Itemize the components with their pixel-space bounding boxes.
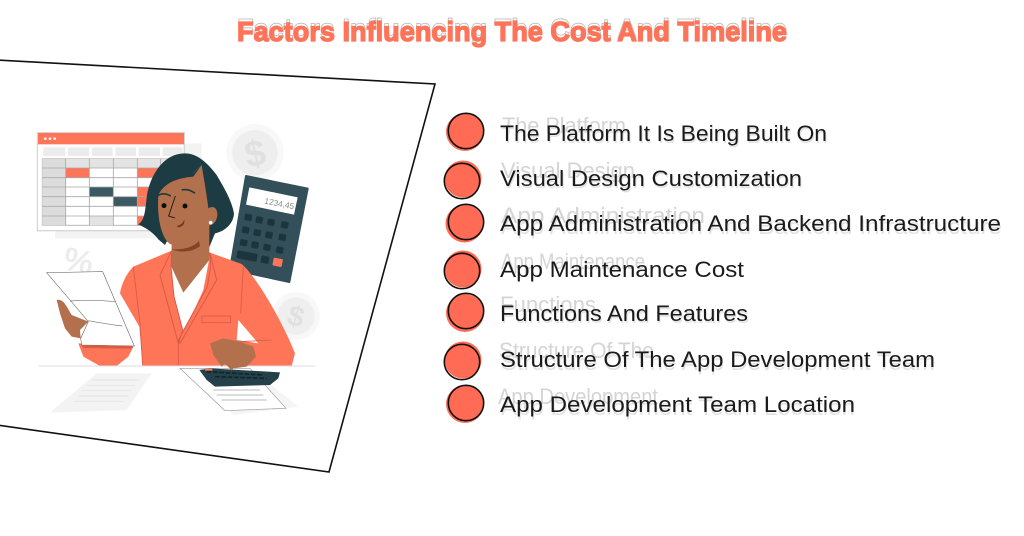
illustration: accountant at desk: [37, 124, 320, 415]
paper on desk left: [50, 373, 152, 413]
coin lower: [272, 292, 320, 340]
item 2: Visual Design Customization: [500, 166, 802, 191]
item 7: App Development Team Location: [500, 392, 855, 417]
paper in hand: [47, 272, 134, 349]
woman: hair: [138, 153, 234, 249]
calculator: [230, 176, 308, 282]
item 5: [446, 292, 749, 332]
item 7: App Development Team Location: [501, 395, 855, 420]
item 6: Structure Of The App Development Team: [500, 347, 935, 372]
desk calculator: [199, 368, 280, 387]
panel: slanted illustration frame: [0, 60, 435, 472]
item 1: [446, 113, 828, 151]
hand on calculator: [210, 338, 256, 371]
coin lower: $: [284, 299, 308, 334]
woman: shirt and neck: [171, 225, 209, 342]
title: Factors Influencing The Cost And Timeline: [237, 13, 787, 44]
item 3: App Administration And Backend Infrastructure: [500, 211, 1001, 236]
item 4: App Maintenance: [501, 249, 645, 274]
woman: face: [157, 165, 217, 245]
title: Factors Influencing The Cost And Timeline: [237, 16, 787, 47]
item 1: The Platform It Is Being Built On: [501, 123, 828, 148]
item 6: Structure Of The: [499, 338, 654, 363]
paper under calculator: [180, 368, 298, 415]
item 3: [446, 203, 1002, 242]
item 2: [444, 158, 803, 199]
item 7: App Development: [498, 384, 658, 409]
item 3: App Administration And Backend Infrastructure: [501, 214, 1002, 239]
item 5: Functions: [500, 292, 596, 317]
item 5: Functions And Features: [500, 301, 748, 326]
item 6: [444, 338, 935, 380]
item 6: Structure Of The App Development Team: [501, 350, 935, 375]
item 5: Functions And Features: [501, 303, 749, 328]
calculator: 1234,45: [264, 196, 295, 211]
item 2: Visual Design: [501, 158, 635, 183]
woman: lapels: [160, 251, 217, 343]
item 2: Visual Design Customization: [501, 168, 803, 193]
item 1: The Platform: [502, 113, 626, 138]
list: factors: [444, 113, 1002, 423]
item 7: [446, 384, 855, 423]
percent sign: %: [60, 241, 97, 283]
desk line: [38, 364, 315, 367]
coin top: [226, 124, 284, 181]
item 3: App Administration: [501, 203, 705, 228]
coin top: $: [241, 131, 269, 176]
item 1: The Platform It Is Being Built On: [500, 121, 827, 146]
item 4: App Maintenance Cost: [500, 257, 744, 282]
spreadsheet window: [37, 133, 202, 238]
item 4: [444, 249, 744, 289]
woman: jacket: [78, 251, 295, 366]
